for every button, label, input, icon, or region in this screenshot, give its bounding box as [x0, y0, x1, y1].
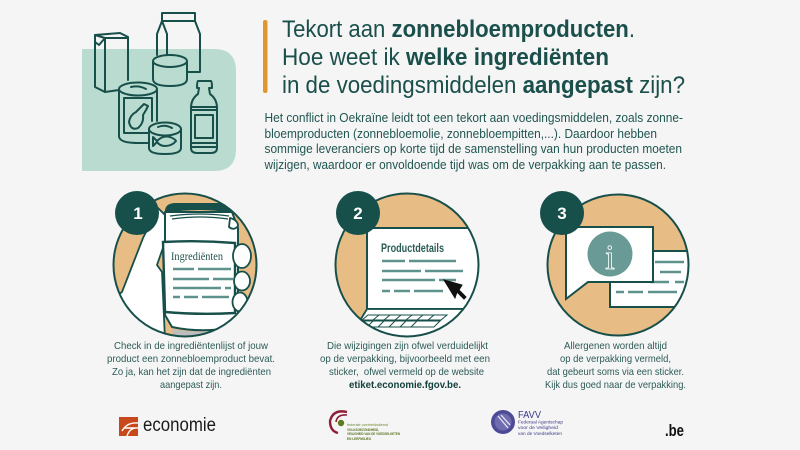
title: [282, 16, 685, 99]
logo: federale overheidsdienst: VEILIGHEID VAN DE VOEDSELKETEN: [347, 432, 400, 436]
badge: 1: [115, 191, 159, 235]
logo: FAVV: [491, 410, 563, 436]
screen text lines: [382, 261, 463, 291]
panel: step 2: [320, 191, 490, 391]
badge: 3: 3: [557, 204, 567, 223]
icon: cursor: [444, 280, 466, 299]
logo: federale overheidsdienst: EN LEEFMILIEU: [347, 437, 371, 441]
caption: step 2: op de verpakking, bijvoorbeeld met een: [320, 353, 490, 365]
title: Tekort aan zonnebloemproducten.: [282, 16, 635, 43]
label text lines: [173, 269, 233, 297]
title: in de voedingsmiddelen aangepast zijn?: [282, 72, 685, 99]
logo: FAVV: voor de Veiligheid: [518, 425, 558, 430]
intro text block: wijzigen, waardoor er onvoldoende tijd was om de verpakking aan te passen.: [264, 158, 666, 172]
intro text block: sommige leveranciers op korte tijd de samenstelling van hun producten moeten: [264, 142, 682, 156]
logo: federale overheidsdienst: federale overheidsdienst: [347, 422, 389, 427]
label: Ingrediënten: Ingrediënten: [171, 249, 223, 263]
illustration: laptop: [334, 192, 480, 338]
caption: step 1: [107, 340, 275, 391]
logo: economie: [119, 414, 216, 436]
icon: milk carton: [95, 33, 128, 92]
panel: teal background: [82, 49, 236, 171]
icon: bottle: [191, 81, 217, 153]
logo: FAVV: FAVV: [518, 410, 541, 421]
caption: step 1: product een zonnebloemproduct bevat.: [107, 353, 275, 365]
laptop keyboard: [360, 309, 462, 336]
caption: step 3: Allergenen worden altijd: [564, 340, 667, 352]
intro text block: [264, 111, 683, 172]
intro text block: Het conflict in Oekraïne leidt tot een tekort aan voedingsmiddelen, zoals zonne-: [264, 111, 683, 125]
speech bubble: [566, 227, 653, 299]
jar label: [163, 241, 235, 314]
icon: fingers: [232, 244, 251, 312]
label: Productdetails: Productdetails: [381, 241, 444, 255]
icon: info: i: [605, 238, 615, 277]
illustration: food packaging: [82, 13, 236, 171]
panel: step 3: [540, 191, 700, 391]
panel: step 1: [100, 191, 275, 391]
logo: federale overheidsdienst: [330, 411, 400, 441]
intro text block: bloemproducten (zonnebloemolie, zonnebloempitten,...). Daardoor hebben: [264, 127, 657, 141]
icon: small can with fish: [149, 122, 181, 154]
logo: federale overheidsdienst: VOLKSGEZONDHEID,: [347, 428, 379, 432]
icon: paper bag: [157, 13, 200, 72]
caption: step 2: Die wijzigingen zijn ofwel verduidelijkt: [327, 340, 488, 352]
icon: hand: [120, 206, 166, 333]
icon: info: [588, 232, 632, 277]
badge: 2: 2: [353, 204, 363, 223]
caption: step 3: [545, 340, 686, 391]
caption: step 3: op de verpakking vermeld,: [560, 353, 671, 365]
caption: step 1: aangepast zijn.: [160, 379, 222, 391]
caption: step 1: Check in de ingrediëntenlijst of jouw: [114, 340, 268, 352]
caption: step 2: [320, 340, 490, 391]
icon: large can with chicken: [119, 82, 157, 143]
badge: 1: 1: [133, 204, 143, 223]
caption: step 3: dat gebeurt soms via een sticker.: [547, 366, 684, 378]
logo: FAVV: van de Voedselketen: [518, 431, 562, 436]
icon: middle can: [153, 55, 187, 86]
rear text box: [610, 251, 700, 307]
logo: FAVV: Federaal Agentschap: [518, 420, 563, 424]
caption: step 2: sticker, ofwel vermeld op de website: [329, 366, 484, 378]
illustration: info speech bubble: [548, 194, 700, 336]
illustration: jar in hand: [112, 192, 258, 338]
accent bar: [263, 20, 268, 93]
rear box text lines: [616, 262, 684, 292]
icon: jar: [165, 212, 238, 330]
logo: .be: .be: [665, 421, 684, 440]
laptop screen: [367, 228, 487, 309]
logo: economie: economie: [143, 414, 216, 436]
caption: step 2: etiket.economie.fgov.be.: [349, 379, 461, 391]
caption: step 1: Zo ja, kan het zijn dat de ingrediënten: [112, 366, 271, 378]
title: Hoe weet ik welke ingrediënten: [282, 44, 609, 71]
badge: 3: [540, 191, 584, 235]
caption: step 3: Kijk dus goed naar de verpakking.: [545, 379, 686, 391]
badge: 2: [336, 191, 380, 235]
